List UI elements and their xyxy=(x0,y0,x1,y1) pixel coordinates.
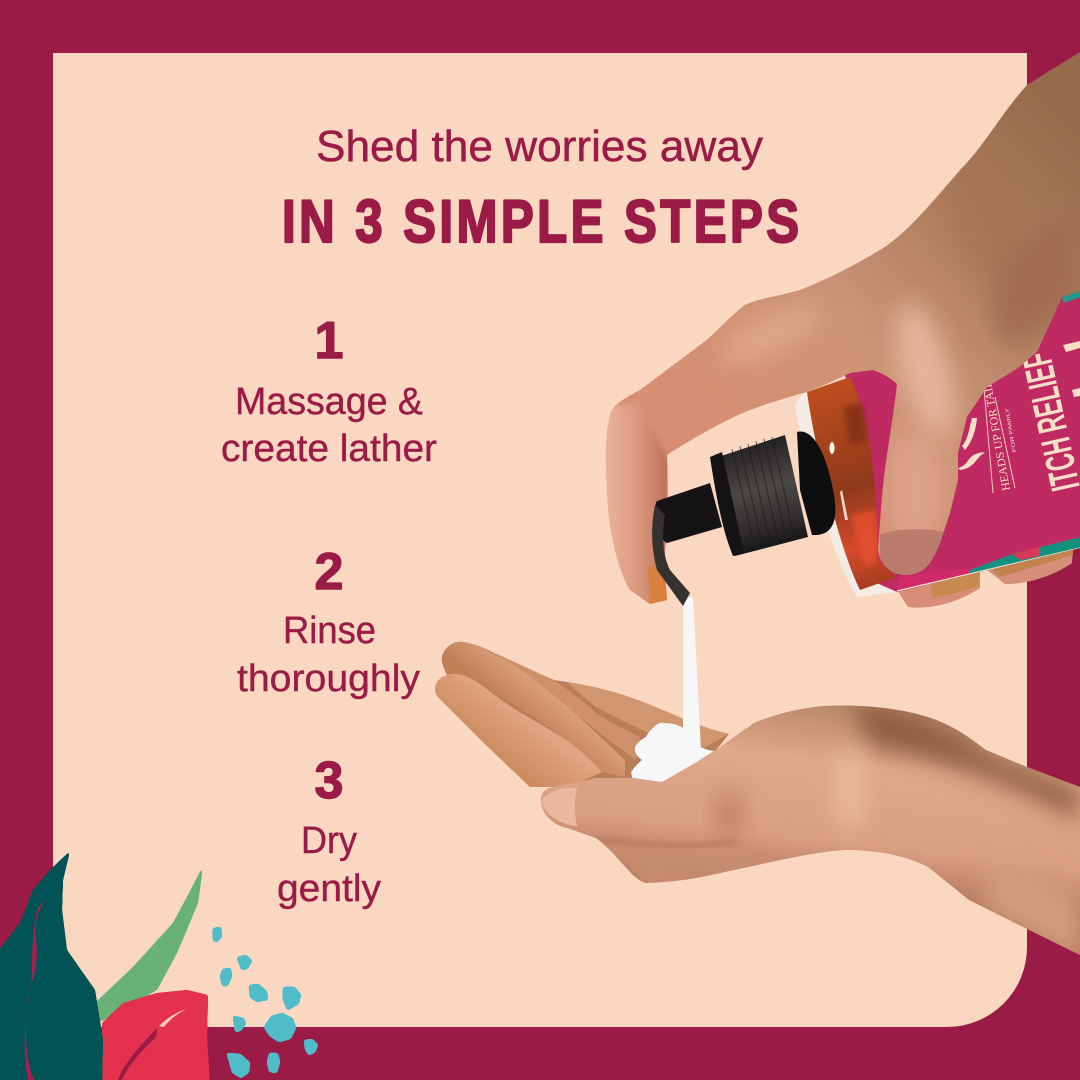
middle finger xyxy=(442,642,625,777)
lower hand fingers xyxy=(435,642,729,787)
step 3: Dry xyxy=(301,820,357,862)
step 1 xyxy=(221,312,437,470)
heading: shed the worries away: Shed the worries away xyxy=(316,122,763,171)
blue speckles xyxy=(214,928,317,1077)
step 3: gently xyxy=(277,868,381,910)
step 1: Massage & xyxy=(235,381,423,423)
fingertip shading xyxy=(606,403,668,604)
label xyxy=(845,291,1080,592)
ribbed collar xyxy=(710,435,808,556)
step 2: thoroughly xyxy=(237,658,420,700)
pump nozzle xyxy=(652,483,722,606)
finger base mass xyxy=(435,642,729,787)
step 1: 1 xyxy=(315,312,343,370)
thumbnail xyxy=(880,529,945,575)
label: FOR FAMILY xyxy=(1004,406,1018,453)
ring finger xyxy=(492,652,640,760)
thumbnail xyxy=(542,788,577,826)
fingers behind bottle xyxy=(897,548,1073,608)
white bottle rim xyxy=(795,390,897,597)
red flower xyxy=(102,990,210,1080)
heading: in 3 simple steps: IN 3 SIMPLE STEPS xyxy=(282,187,803,255)
liquid stream and foam xyxy=(631,597,720,790)
step 1: create lather xyxy=(221,428,437,470)
little finger xyxy=(567,682,729,750)
palm, thumb and arm xyxy=(541,700,1080,960)
teal leaf xyxy=(0,851,103,1080)
neck ring xyxy=(797,432,835,535)
step 3: 3 xyxy=(315,752,343,810)
index fingernail xyxy=(648,564,667,604)
green leaf xyxy=(95,866,203,1022)
step 3 xyxy=(277,752,381,910)
index finger xyxy=(435,674,602,787)
amber glass xyxy=(807,377,897,590)
step 2 xyxy=(237,543,420,700)
step 2: 2 xyxy=(315,543,343,601)
botanical decoration xyxy=(0,851,317,1080)
bottle body xyxy=(710,280,1080,610)
label: HEADS UP FOR TAILS xyxy=(981,373,1013,492)
step 2: Rinse xyxy=(283,610,376,652)
upper hand pressing pump xyxy=(600,52,1080,610)
